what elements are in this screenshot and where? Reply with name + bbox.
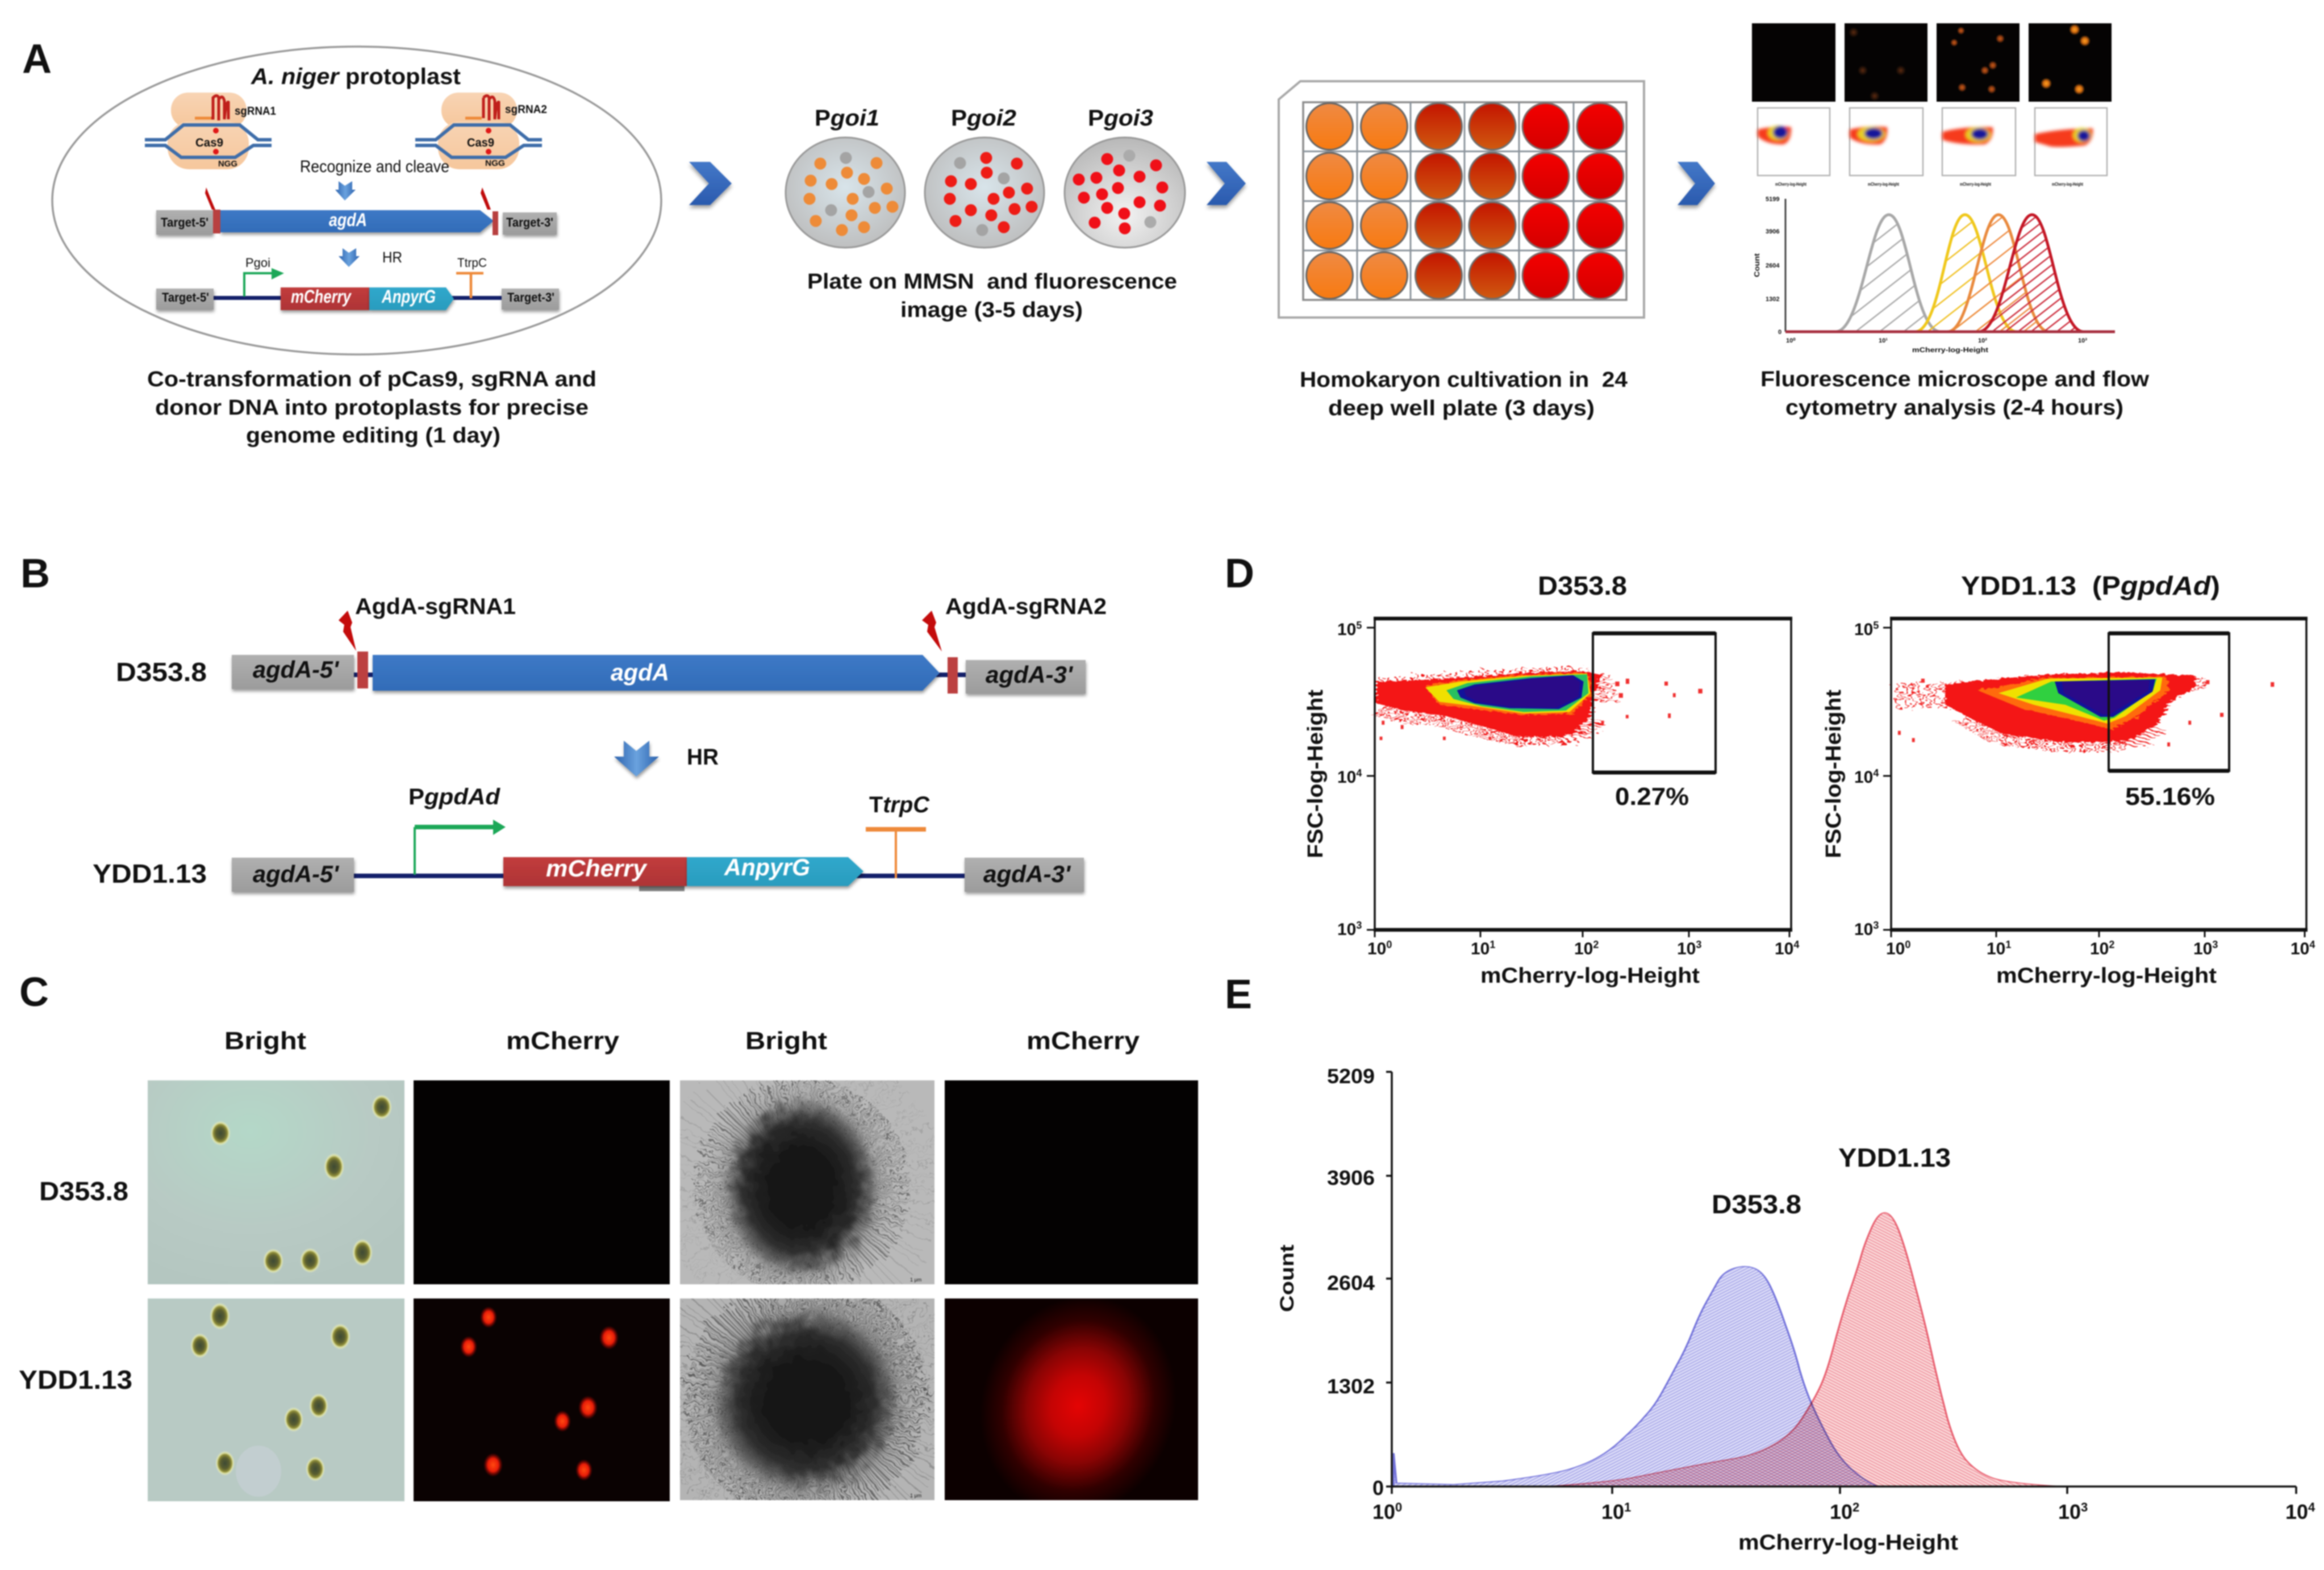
panel letter A: A [22,36,52,82]
arrow down 2 [339,248,360,267]
caption step 3: deep well plate (3 days) [1328,396,1595,420]
x tick labels: 10 [2058,1500,2081,1523]
image: D353.8 pellet bright: 1 μm [910,1277,921,1283]
y tick labels: 1302 [1327,1375,1375,1398]
tick labels D353.8: 10 [1337,620,1356,639]
mini flow cytometry plots: mCherry-log-Height [2052,182,2083,187]
column headers: Bright [224,1027,306,1055]
caption step 1: donor DNA into protoplasts for precise [155,396,589,420]
plot title YDD1.13: YDD1.13 (P gpdAd ) [1961,571,2220,600]
24 deep well plate [1279,81,1644,318]
mini histogram overlay: 10⁰ [1786,337,1796,344]
plate labels: Pgoi3 [1088,106,1153,131]
column headers [224,1027,1140,1055]
tick labels YDD1.13: 5 [1873,620,1879,631]
donor construct: Target-5' [162,290,209,304]
tick labels YDD1.13: 10 [2193,940,2212,958]
panel A: genome editing workflow [22,23,2149,448]
tick labels D353.8: 10 [1337,768,1356,787]
curve label D353.8: D353.8 [1712,1189,1801,1219]
y tick labels: 2604 [1327,1271,1375,1295]
plate labels: Pgoi1 [815,106,879,131]
image: YDD1.13 pellet bright [679,1297,935,1501]
tick labels YDD1.13: 10 [1886,940,1905,958]
mini histogram overlay: 0 [1778,329,1781,336]
plate Pgoi3 [1065,137,1185,248]
tick labels YDD1.13: 2 [2109,939,2114,950]
Cas9 complex with sgRNA2 [415,93,547,169]
tick labels YDD1.13: 3 [1873,920,1879,931]
mini histogram overlay: 10¹ [1879,337,1888,344]
locus YDD1.13 [232,820,1084,892]
x tick labels: 3 [2081,1500,2088,1514]
strain label YDD1.13: YDD1.13 [93,859,207,888]
y tick labels: 5209 [1327,1064,1375,1088]
gate percent D353.8: 0.27% [1615,783,1689,811]
mini histogram overlay: 2604 [1766,262,1780,269]
y tick labels [1327,1064,1384,1500]
x tick labels [1372,1500,2315,1523]
y tick labels: 3906 [1327,1166,1375,1189]
tick labels D353.8: 1 [1489,939,1495,950]
cut site lightning right [922,611,942,652]
locus D353.8 [232,652,1086,694]
x axis title right: mCherry-log-Height [1996,964,2217,988]
density scatter YDD1.13 [1896,673,2274,747]
mini flow cytometry plots: mCherry-log-Height [1775,182,1806,187]
cut site lightning left [339,611,356,651]
gate YDD1.13 [2109,633,2229,771]
tick labels D353.8: 10 [1775,940,1793,958]
panel letter E: E [1225,972,1252,1017]
column headers: mCherry [1027,1027,1140,1055]
caption step 4: cytometry analysis (2-4 hours) [1785,396,2123,420]
tick labels YDD1.13: 0 [1905,939,1910,950]
donor construct: Target-3' [507,290,554,304]
caption step 2 [807,270,1177,322]
mini histogram overlay [1753,196,2115,354]
tick labels YDD1.13: 10 [2290,940,2309,958]
locus YDD1.13: AnpyrG [724,854,810,880]
image: D353.8 pellet mCherry [945,1080,1198,1284]
tick labels YDD1.13: 10 [1854,920,1873,939]
plate Pgoi1 [786,137,905,248]
x tick labels: 4 [2308,1500,2315,1514]
panel C: microscopy images [19,970,1204,1541]
tick labels YDD1.13 [1854,620,2315,958]
process arrow 2 [1207,162,1246,205]
caption step 1: genome editing (1 day) [246,424,500,448]
Cas9 complex with sgRNA2: Cas9 [467,136,494,149]
mini flow cytometry plots: mCherry-log-Height [1868,182,1899,187]
plot frame YDD1.13 [1883,619,2308,937]
gate D353.8 [1593,633,1716,773]
tick labels YDD1.13: 4 [1873,767,1879,779]
recognize and cleave label: Recognize and cleave [300,157,449,176]
tick labels D353.8: 4 [1793,939,1799,950]
process arrow 1 [689,162,732,205]
image: YDD1.13 pellet bright: 1 μm [910,1493,921,1498]
plate Pgoi2 [925,137,1044,248]
Cas9 complex with sgRNA1 [145,93,276,169]
x tick labels: 10 [1830,1500,1852,1523]
target locus before editing [156,187,557,235]
tick labels YDD1.13: 10 [1854,768,1873,787]
locus YDD1.13: mCherry [546,855,648,882]
caption step 4 [1760,368,2149,420]
panel letter D: D [1225,551,1254,596]
mini histogram overlay: 5199 [1766,196,1779,203]
target locus before editing: Target-3' [506,215,553,229]
mini histogram overlay: Count [1753,253,1761,277]
target locus before editing: agdA [329,210,367,230]
x tick labels: 10 [2285,1500,2308,1523]
Cas9 complex with sgRNA2: sgRNA2 [505,103,547,116]
sgRNA1 label: AgdA-sgRNA1 [355,594,516,619]
process arrow 3 [1678,162,1715,205]
Cas9 complex with sgRNA1: NGG [218,159,237,169]
curve label YDD1.13: YDD1.13 [1838,1143,1951,1172]
HR label small: HR [382,249,402,266]
tick labels D353.8: 3 [1696,939,1701,950]
donor construct [156,256,559,310]
histogram curves [1393,1213,2066,1487]
tick labels D353.8 [1337,620,1799,958]
protoplast title: A. niger protoplast [251,64,461,89]
y axis title right: FSC-log-Height [1822,690,1846,858]
axes and ticks [1386,1072,2296,1494]
donor construct: Pgoi [245,256,270,270]
image: D353.8 pellet bright [680,1078,934,1295]
donor construct: AnpyrG [381,286,436,307]
x tick labels: 10 [1372,1500,1395,1523]
x tick labels: 2 [1852,1500,1859,1514]
tick labels D353.8: 10 [1337,920,1356,939]
image: YDD1.13 pellet mCherry [945,1271,1204,1541]
y tick labels: 0 [1372,1476,1384,1500]
image: YDD1.13 spores bright [148,1298,404,1501]
tick labels YDD1.13: 10 [1987,940,2005,958]
panel letter C: C [19,970,49,1015]
caption step 1 [147,368,596,448]
row label YDD1.13: YDD1.13 [19,1365,132,1394]
donor construct: mCherry [291,286,352,307]
tick labels YDD1.13: 10 [1854,620,1873,639]
HR label: HR [687,745,719,770]
x tick labels: 1 [1624,1500,1631,1514]
mini flow cytometry plots [1758,108,2107,187]
mini histogram overlay: mCherry-log-Height [1912,346,1988,354]
caption step 4: Fluorescence microscope and flow [1760,368,2149,391]
x axis title left: mCherry-log-Height [1480,964,1700,988]
tick labels YDD1.13: 4 [2309,939,2315,950]
image: YDD1.13 spores mCherry [414,1298,670,1501]
row label D353.8: D353.8 [39,1176,128,1206]
Cas9 complex with sgRNA2: NGG [485,158,505,168]
image: D353.8 mCherry spores [414,1080,670,1284]
Cas9 complex with sgRNA1: sgRNA1 [235,105,276,118]
gate percent YDD1.13: 55.16% [2125,783,2215,811]
protoplast ellipse [52,47,661,354]
plate labels [815,106,1153,131]
caption step 2: Plate on MMSN and fluorescence [807,270,1177,294]
image: D353.8 spores bright [148,1080,404,1284]
strain label D353.8: D353.8 [116,657,207,687]
locus YDD1.13: agdA-5' [253,861,340,887]
column headers: Bright [745,1027,827,1055]
tick labels D353.8: 5 [1356,620,1362,631]
sgRNA2 label: AgdA-sgRNA2 [945,594,1107,619]
density scatter D353.8 [1376,669,1703,740]
y axis title left: FSC-log-Height [1304,690,1328,858]
caption step 1: Co-transformation of pCas9, sgRNA and [147,368,596,391]
arrow down 1 [335,181,356,201]
mini histogram overlay: 3906 [1766,228,1779,235]
target locus before editing: Target-5' [161,215,208,229]
tick labels YDD1.13: 10 [2090,940,2109,958]
x axis title: mCherry-log-Height [1738,1531,1958,1555]
mini histogram overlay: 10³ [2078,337,2087,344]
tick labels D353.8: 4 [1356,767,1362,779]
y axis title: Count [1276,1245,1298,1312]
mini flow cytometry plots: mCherry-log-Height [1960,182,1991,187]
locus YDD1.13: agdA-3' [983,861,1071,887]
caption step 2: image (3-5 days) [900,298,1083,322]
tick labels D353.8: 10 [1471,940,1489,958]
tick labels YDD1.13: 1 [2005,939,2011,950]
terminator label: TtrpC [869,792,930,817]
promoter label: PgpdAd [408,784,501,809]
mini histogram overlay: 1302 [1766,296,1779,303]
HR arrow [614,741,659,776]
locus D353.8: agdA-3' [986,661,1074,688]
tick labels D353.8: 0 [1386,939,1392,950]
x tick labels: 0 [1395,1500,1402,1514]
tick labels D353.8: 10 [1574,940,1593,958]
fluorescence microscope images [1752,23,2112,102]
panel D: flow cytometry dot plots [1225,551,2315,988]
donor construct: TtrpC [457,256,487,270]
tick labels D353.8: 10 [1677,940,1696,958]
tick labels YDD1.13: 3 [2212,939,2218,950]
panel B: gene replacement scheme [20,551,1107,892]
column headers: mCherry [506,1027,620,1055]
panel E: overlaid histogram [1225,972,2315,1555]
locus D353.8: agdA [611,659,669,686]
caption step 3 [1300,368,1628,420]
tick labels D353.8: 3 [1356,920,1362,931]
tick labels D353.8: 10 [1367,940,1386,958]
tick labels D353.8: 2 [1593,939,1599,950]
plate labels: Pgoi2 [951,106,1016,131]
plot frame D353.8 [1367,619,1792,937]
caption step 3: Homokaryon cultivation in 24 [1300,368,1628,392]
x tick labels: 10 [1601,1500,1624,1523]
locus D353.8: agdA-5' [253,656,340,683]
panel letter B: B [20,551,50,596]
Cas9 complex with sgRNA1: Cas9 [195,136,223,149]
plot title D353.8: D353.8 [1538,571,1627,600]
mini histogram overlay: 10² [1978,337,1987,344]
